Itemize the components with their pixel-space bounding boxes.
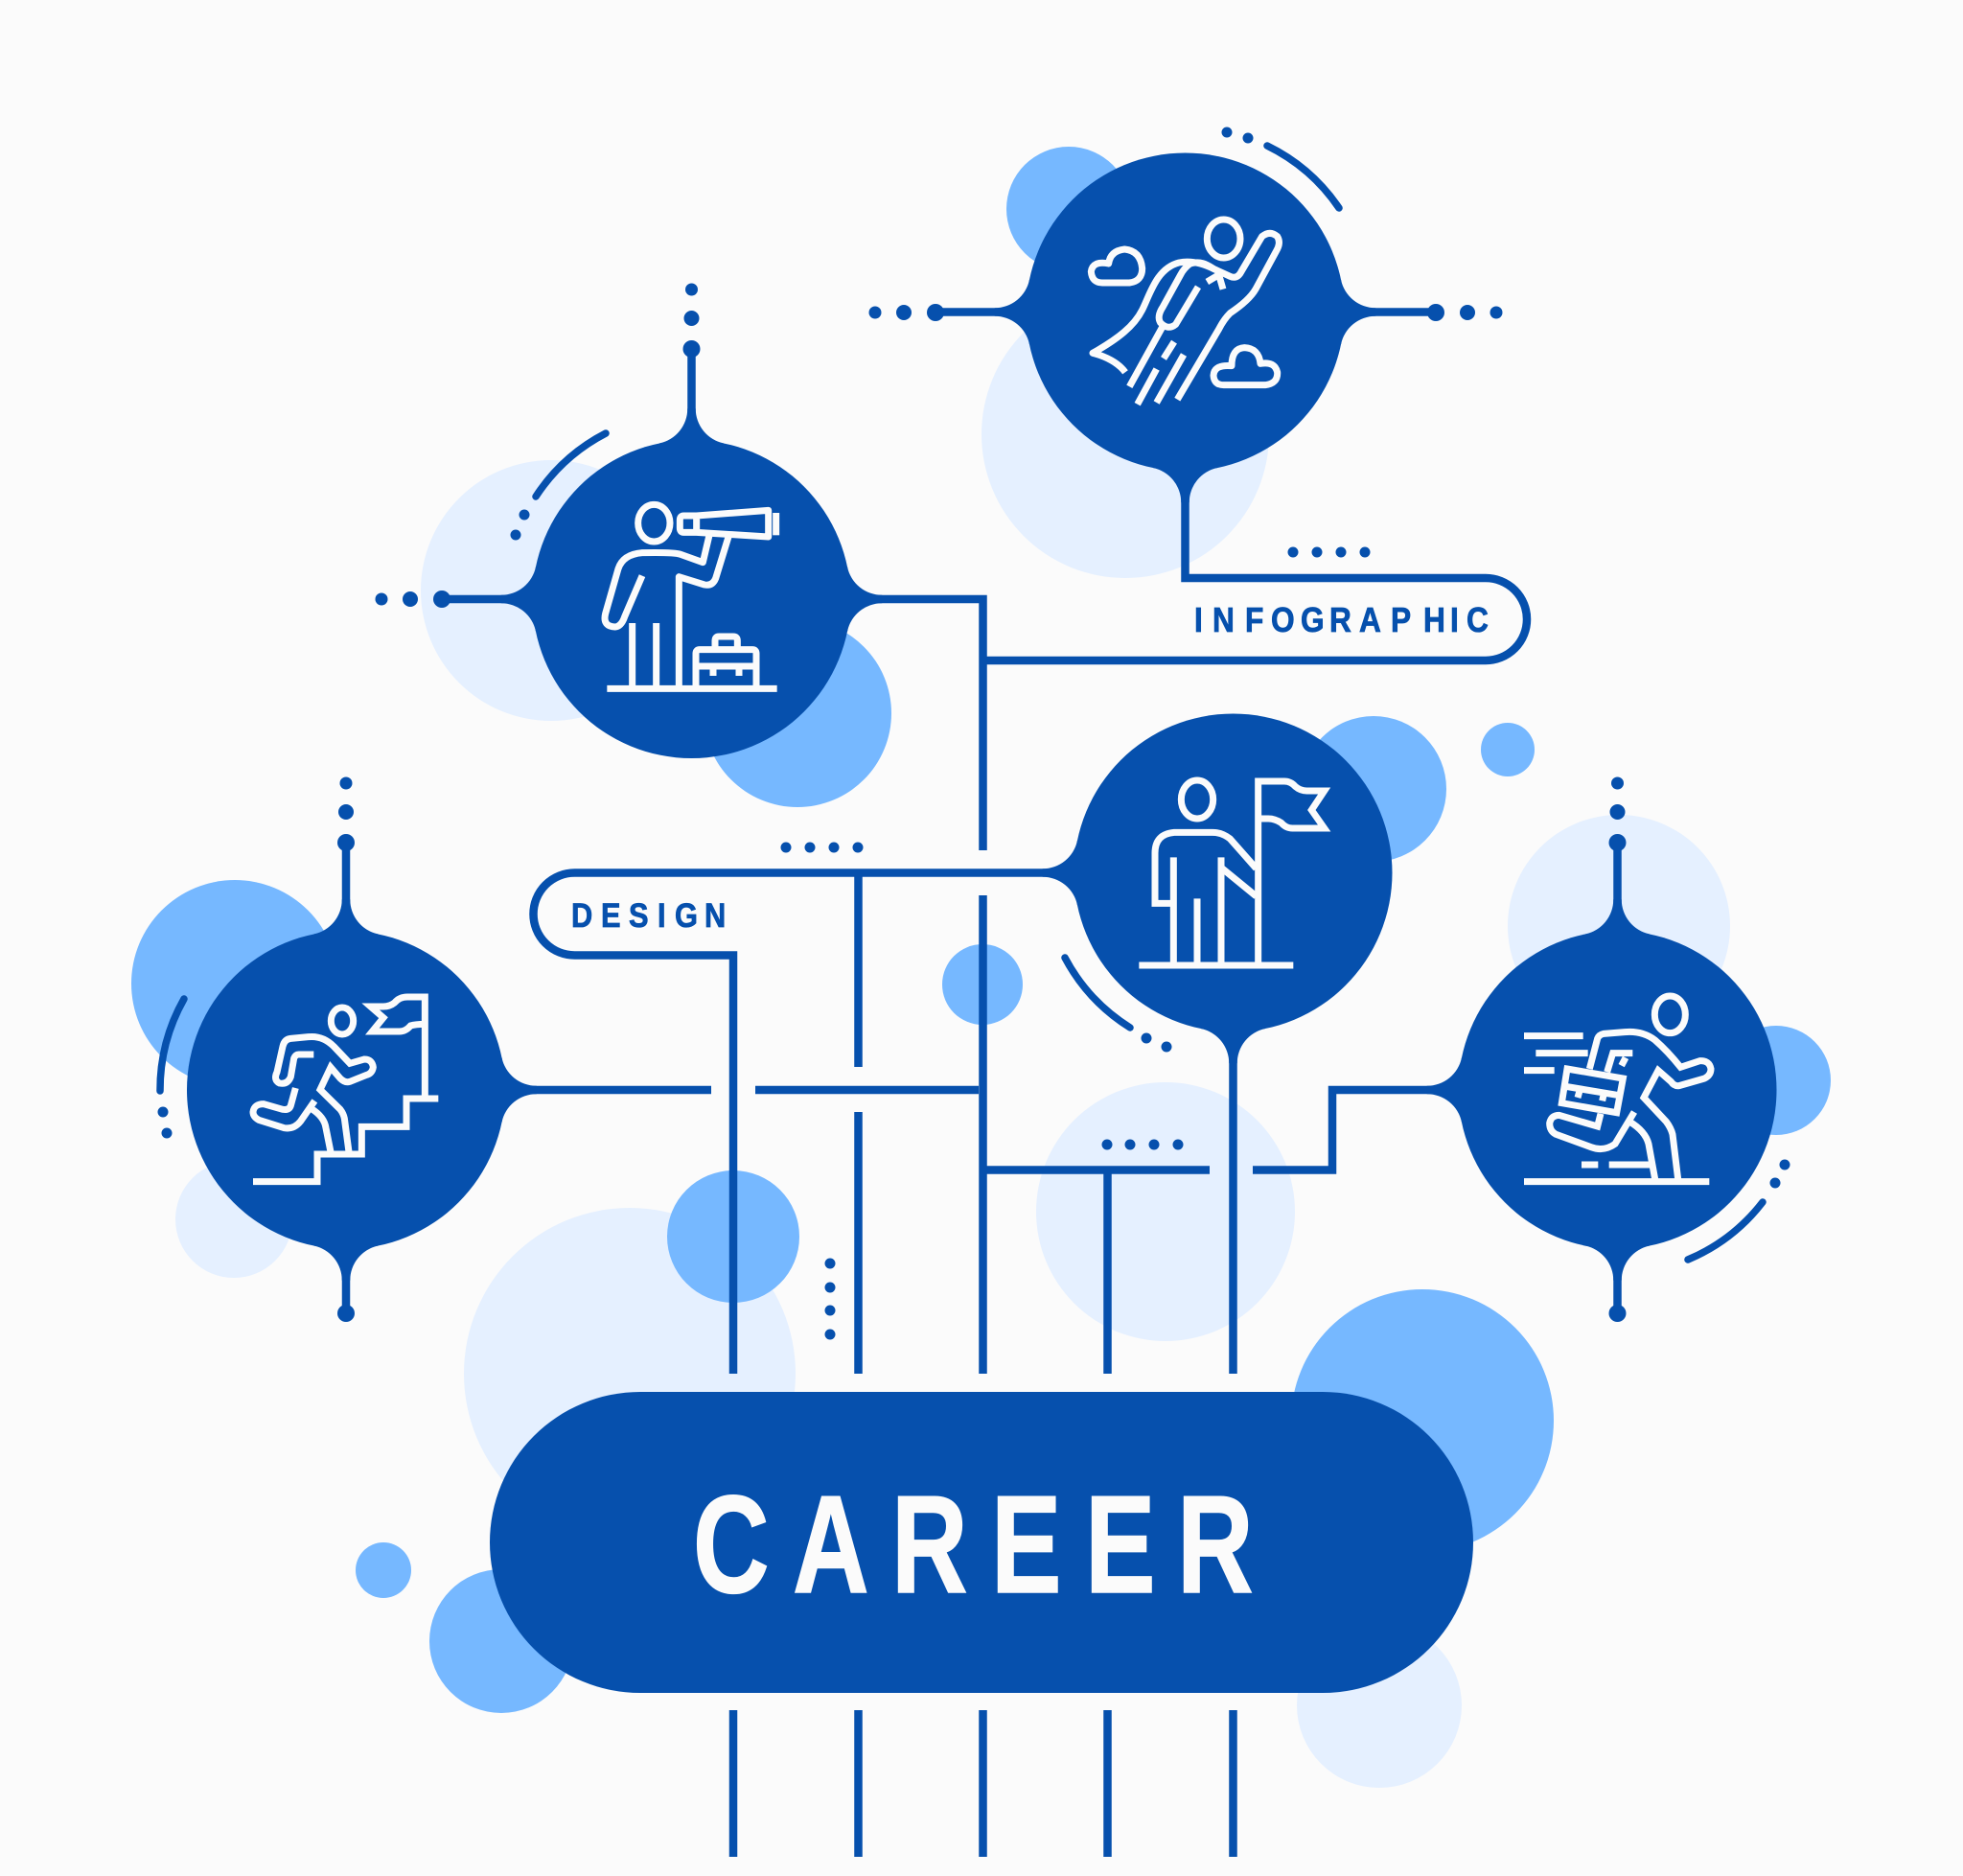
node: person with telescope: [376, 284, 882, 758]
icon: runner on stairs toward flag: [253, 997, 438, 1182]
icon: person with telescope and briefcase: [605, 504, 777, 688]
connector dots: telescope node: [376, 284, 700, 608]
background circles: [131, 147, 1831, 1788]
banner: CAREER: [490, 1392, 1473, 1693]
node: person with flag: [1043, 713, 1392, 1063]
connector dots: stairs node: [337, 776, 355, 1322]
dotted accents: [780, 546, 1371, 1340]
connector lines: [508, 460, 1527, 1857]
node: person climbing stairs: [157, 776, 537, 1322]
icon: running person with briefcase: [1524, 996, 1711, 1182]
orbit arc: flag node: [1065, 958, 1171, 1053]
label: DESIGN: DESIGN: [571, 896, 726, 934]
node: flying superhero: [868, 127, 1503, 502]
icon: person standing with flag: [1139, 780, 1325, 965]
orbit arc: running node: [1688, 1160, 1790, 1260]
label: INFOGRAPHIC: INFOGRAPHIC: [1194, 601, 1489, 639]
node: person running with briefcase: [1427, 776, 1790, 1322]
icon: flying person with clouds: [1091, 220, 1279, 405]
connector dots: running node: [1608, 776, 1626, 1322]
orbit arc: flying node: [1221, 127, 1339, 208]
connector dots: flying node: [868, 304, 1503, 321]
banner title: CAREER: [693, 1467, 1254, 1623]
orbit arc: telescope node: [510, 433, 606, 541]
orbit arc: stairs node: [157, 999, 184, 1139]
